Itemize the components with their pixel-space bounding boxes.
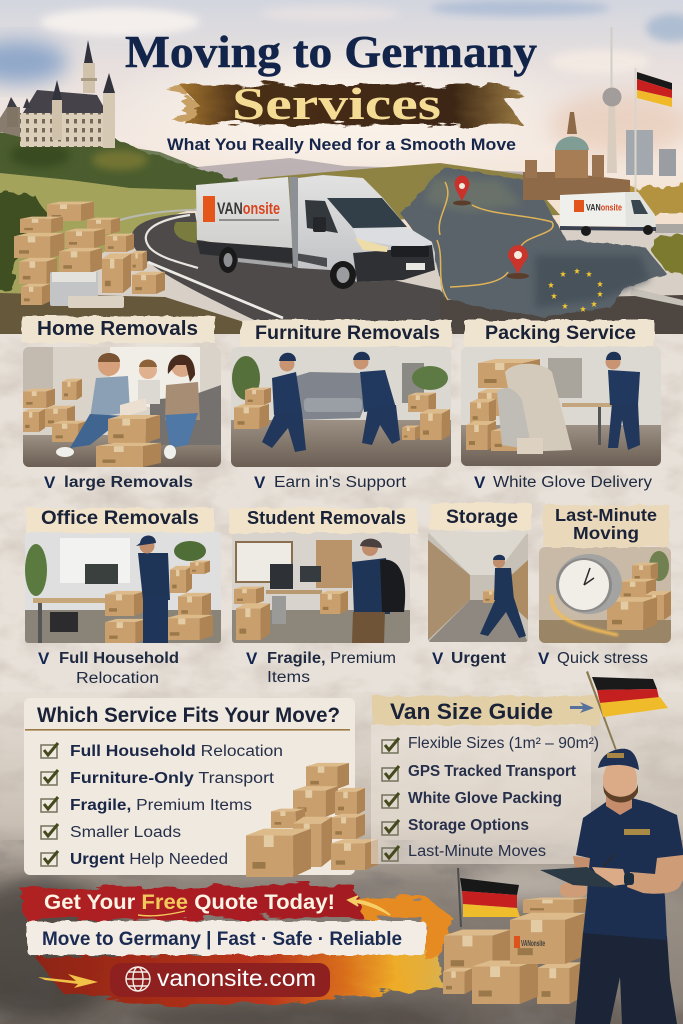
banner: Last-Minute Moving: Moving [573,523,639,543]
caption: Full Household Relocation: Relocation [76,670,159,687]
icon: EU stars [548,268,603,312]
caption: Fragile, Premium Items: Items [267,669,310,686]
panel: Office Removals [25,507,221,687]
castle [0,40,115,148]
checklist: van sizes [382,735,599,861]
caption: Quick stress: V [538,649,550,668]
services brush banner: Services [232,78,441,129]
icon: map pin north [453,175,471,206]
checklist: van sizes: Flexible Sizes (1m² – 90m²) [408,735,599,752]
panel: Home Removals [22,316,221,492]
caption: Urgent: V [432,649,444,668]
panel: Packing Service [461,320,661,492]
panel: Van Size Guide [371,696,600,864]
banner: Furniture Removals: Furniture Removals [255,322,440,344]
banner: Home Removals [22,316,215,343]
title: Moving to Germany [125,26,537,77]
website button: vanonsite.com [157,965,316,991]
photo: clock and boxes [539,547,671,643]
checklist: service fit: Smaller Loads [70,824,181,841]
background: hills and trees [0,130,683,300]
header: Van Size Guide: Van Size Guide [390,699,553,724]
caption: Full Household Relocation: Full Household [59,650,179,667]
checklist: van sizes: Last-Minute Moves [408,843,546,860]
caption: White Glove Delivery: V [474,473,486,492]
background: parchment section [0,334,683,854]
logo box: VANonsite [521,939,545,948]
photo: two movers carrying sofa [231,347,451,467]
icon: clock [556,554,622,614]
stacked cardboard boxes left [14,202,165,308]
photo: student move [232,532,410,643]
checklist: service fit: Fragile, Premium Items [70,797,252,814]
caption: Quick stress: Quick stress [557,650,648,667]
banner: Packing Service [464,320,654,347]
caption: Full Household Relocation [38,649,179,687]
website button [110,963,330,997]
caption: Fragile, Premium Items: Fragile, Premium [267,650,396,667]
caption: Earn in's Support: V [254,473,266,492]
stacked boxes bottom right [443,898,593,1004]
photo: packing mattress [461,347,661,466]
heading: Which Service Fits Your Move?: Which Service Fits Your Move? [37,704,340,727]
caption: Urgent [432,649,506,668]
banner: Student Removals [229,507,417,533]
panel: Student Removals [229,507,417,686]
banner: Office Removals: Office Removals [41,507,199,529]
banner: Student Removals: Student Removals [247,507,406,528]
shirt logo [624,829,650,835]
caption: large Removals: V [44,473,56,492]
banner: Move to Germany tagline: Move to Germany | Fast · Safe · Reliable [42,928,402,950]
banner: Office Removals [26,507,214,533]
panel: Last-Minute Moving [538,505,671,668]
road [0,210,683,340]
icon: curved arrow [348,896,390,915]
arrow pointing to website [38,974,98,988]
checklist: van sizes: White Glove Packing [408,790,562,807]
services brush banner [165,78,522,129]
checklist: van sizes: GPS Tracked Transport [408,763,576,780]
background: lower stone section [0,690,683,1024]
banner: Last-Minute Moving: Last-Minute [555,505,657,525]
subtitle: What You Really Need for a Smooth Move [167,135,516,154]
German flag over Van Size Guide [592,677,668,717]
header: Van Size Guide [372,696,600,725]
call to action splash [36,896,450,1006]
small delivery van [560,192,656,236]
checklist: service fit: Urgent Help Needed [70,851,228,868]
Germany map with route [400,167,666,317]
photo: office packing [25,532,221,643]
panel: Storage [428,503,531,668]
photo: family among boxes [23,347,221,467]
logo box [510,913,586,964]
caption: Earn in's Support [254,473,407,492]
banner: Move to Germany tagline [27,921,426,955]
stacked boxes in panel [246,763,378,877]
checklist: service fit: Furniture-Only Transport [70,770,275,787]
mover with clipboard [540,749,683,1024]
pen [603,854,615,867]
clipboard [540,867,618,888]
caption: large Removals: large Removals [64,474,193,491]
caption: Fragile, Premium Items [246,649,396,686]
caption: large Removals [44,473,193,492]
caption: Fragile, Premium Items: V [246,649,258,668]
trousers [575,932,677,1024]
head [598,749,639,815]
caption: White Glove Delivery: White Glove Delivery [493,474,652,491]
caption: Quick stress [538,649,648,668]
photo: storage corridor [428,532,528,642]
arm and watch [560,855,683,897]
banner: Get Your Free Quote Today! [20,885,390,919]
banner: Packing Service: Packing Service [485,322,636,344]
caption: Urgent: Urgent [451,650,506,667]
panel: Which Service Fits Your Move? [24,698,378,877]
banner: Storage [430,503,531,530]
banner: Storage: Storage [446,506,518,528]
small delivery van: VANonsite [586,202,622,214]
pole of top German flag [586,671,617,750]
icon: map pin south [507,245,529,279]
van logo [203,196,280,222]
Berlin skyline [523,27,676,201]
panel: Furniture Removals [231,320,452,492]
polo shirt [576,797,683,940]
icon: globe [126,967,150,991]
banner: Home Removals: Home Removals [37,318,198,340]
van logo: VANonsite [217,199,280,218]
checklist: service fit [41,743,283,868]
banner: Last-Minute Moving [543,505,669,547]
main VANonsite van [196,175,435,289]
caption: Full Household Relocation: V [38,649,50,668]
caption: Earn in's Support: Earn in's Support [274,474,407,491]
banner: Get Your Free Quote Today!: Get Your Free Quote Today! [44,891,335,914]
background: sky [0,0,683,230]
German flag above boxes [457,868,520,927]
icon: German flag top right [637,72,672,107]
checklist: van sizes: Storage Options [408,817,529,834]
checklist: service fit: Full Household Relocation [70,743,283,760]
